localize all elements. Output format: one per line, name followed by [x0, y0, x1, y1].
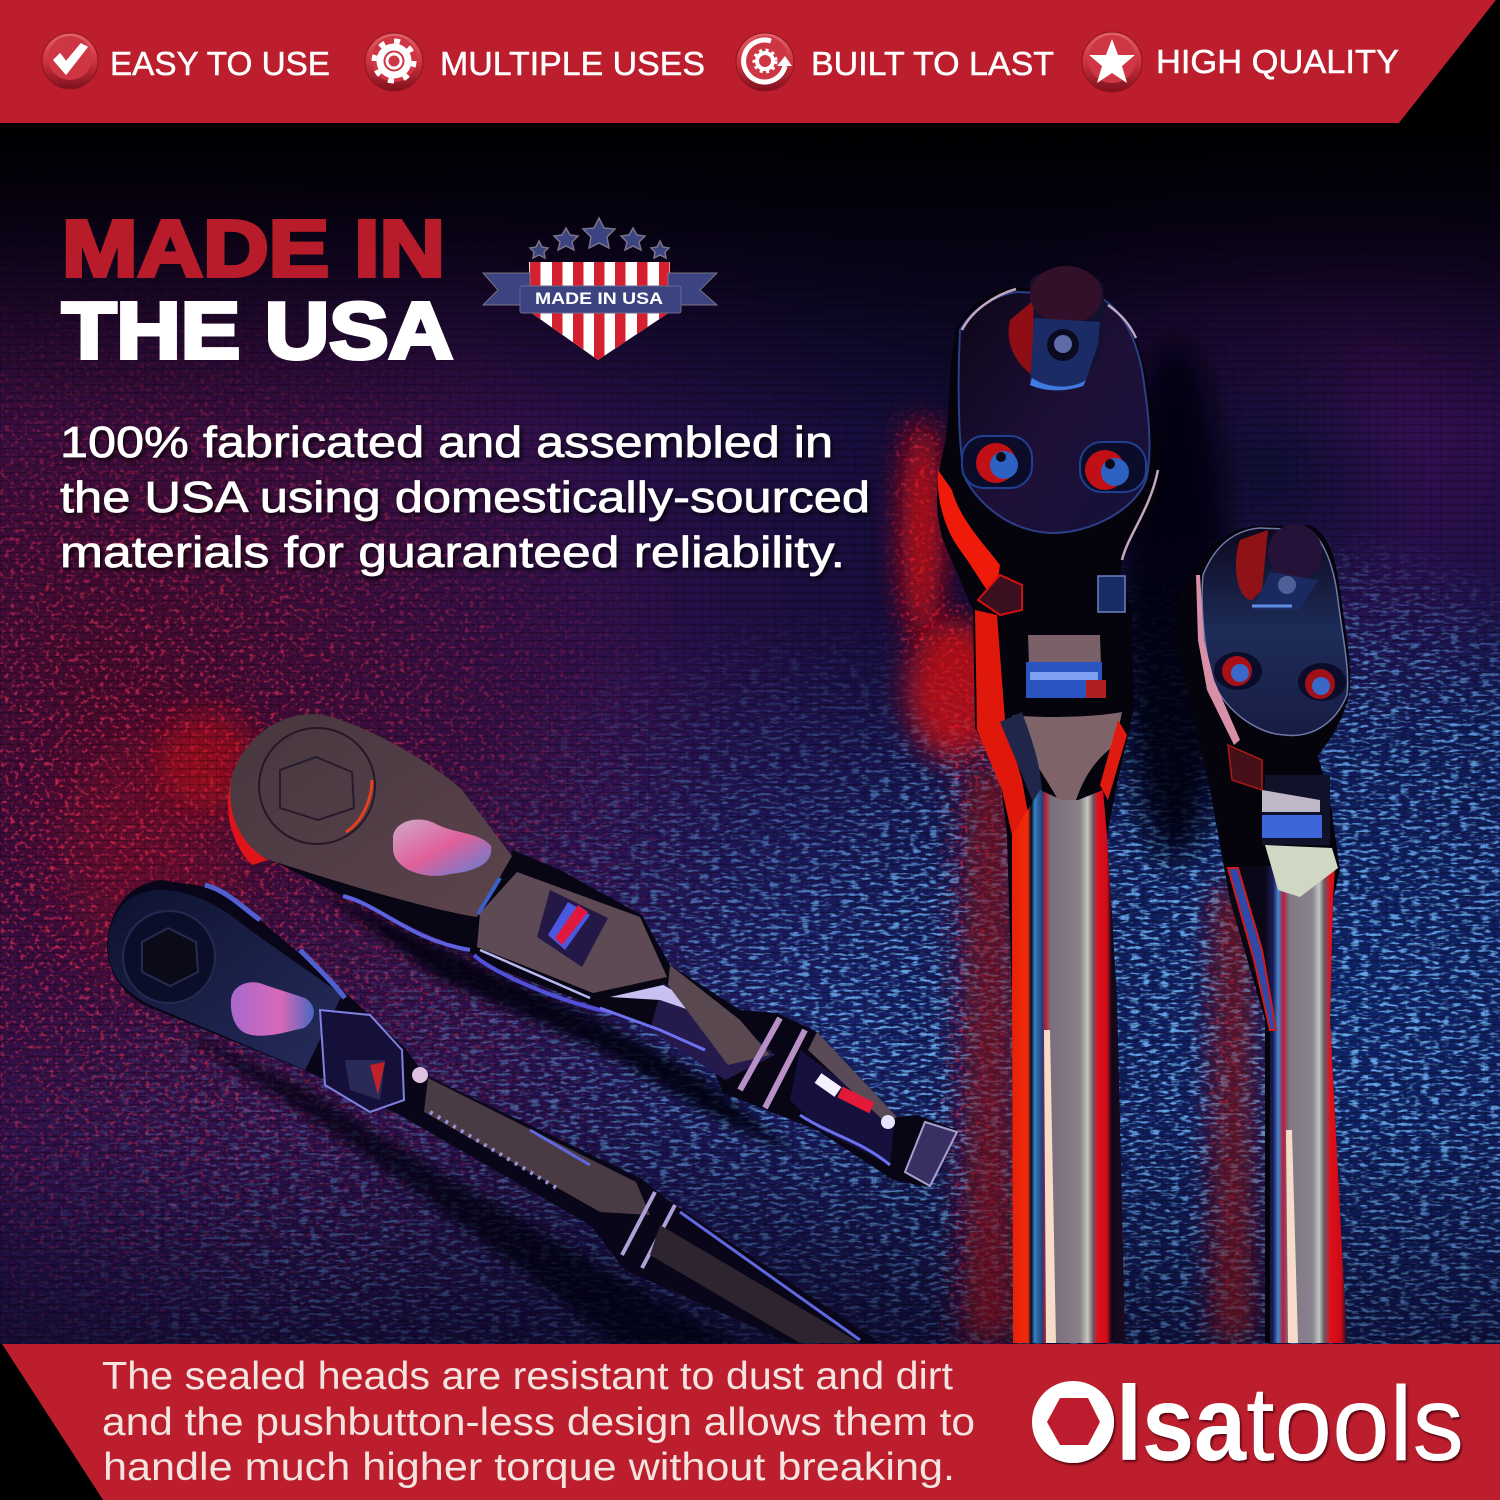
handle yoke V [1013, 712, 1122, 800]
right pivot hole [1080, 442, 1146, 492]
small left rim reflections [1196, 575, 1240, 745]
heading: made in the usa [62, 204, 453, 375]
wrench body silhouette [937, 288, 1158, 1343]
small head face [1202, 528, 1348, 735]
right black corner [1399, 0, 1500, 123]
square drive [1009, 266, 1105, 390]
handle B bright stripe [530, 1130, 860, 1340]
highlight on head rim [962, 289, 1158, 560]
icon: check button [42, 33, 98, 89]
shadow under wrench A [320, 890, 880, 1190]
logo: Olsatools [1029, 1362, 1464, 1485]
heading line 2: THE USA [62, 286, 453, 375]
flex joint knuckle [1098, 576, 1125, 612]
bottom text line 2: and the pushbutton-less design allows them to [102, 1401, 975, 1444]
paragraph: fabrication claim [60, 418, 870, 577]
flex slot B [320, 1010, 428, 1112]
flex plate A [474, 872, 667, 1012]
handle B mauve shaft [650, 1225, 860, 1343]
bottom text block [102, 1355, 975, 1489]
small handle shaft [1230, 866, 1347, 1343]
handle white highlight [1044, 1030, 1056, 1343]
ring and hex socket A [259, 728, 375, 844]
flex joint slot [1026, 635, 1106, 698]
small yoke V [1265, 845, 1338, 897]
feature: multiple uses [365, 33, 705, 91]
small wrench silhouette [1178, 525, 1350, 1343]
label: multiple uses: MULTIPLE USES [440, 45, 705, 82]
icon: star button [1082, 32, 1142, 92]
label: easy to use: EASY TO USE [110, 45, 330, 82]
badge stars [530, 218, 669, 258]
wrench lying diagonal, lower [107, 880, 880, 1345]
banner shape [0, 0, 1496, 123]
small handle highlight [1286, 1130, 1298, 1343]
bottom banner [0, 1344, 1500, 1500]
left pivot hole [962, 436, 1032, 488]
release paddle B [231, 982, 314, 1036]
badge: made in usa shield [483, 218, 717, 362]
small pivot holes [1214, 652, 1346, 701]
bottom text line 3: handle much higher torque without breaking. [103, 1446, 955, 1489]
wrench B head [108, 890, 342, 1070]
logo: Olsatools: tools [1246, 1365, 1464, 1483]
bottom banner shape [2, 1344, 1500, 1500]
grip rings B [622, 1192, 675, 1268]
shadow under wrench B [180, 1030, 740, 1345]
top feature banner [0, 0, 1500, 123]
feature: easy to use [42, 33, 330, 89]
handle B engraved logo dots [430, 1112, 560, 1190]
logo: Olsatools: lsa [1116, 1365, 1247, 1483]
wrench B outer silhouette [107, 880, 880, 1343]
release paddle A [393, 820, 491, 876]
left red reflection [938, 470, 1000, 600]
chrome rim B [205, 885, 345, 998]
small square drive [1236, 524, 1322, 610]
badge ribbon tails [483, 273, 717, 305]
badge ribbon band [520, 286, 681, 313]
red edge A [228, 780, 268, 865]
label: built to last: BUILT TO LAST [811, 45, 1054, 82]
wrench glow: red light on fabric [902, 340, 1251, 1340]
icon: cycle gear button [736, 33, 794, 91]
badge label: MADE IN USA [535, 290, 663, 308]
icon: gear button [365, 33, 423, 91]
badge shield stripes [529, 262, 671, 362]
heading line 1: MADE IN [62, 204, 445, 293]
handle B plate with engraved logo [424, 1078, 650, 1215]
wrench lying diagonal, upper [228, 714, 957, 1190]
feature: built to last [736, 33, 1054, 91]
feature: high quality [1082, 32, 1399, 92]
head face plate [959, 292, 1149, 533]
paragraph line 1: 100% fabricated and assembled in [60, 418, 833, 467]
wrench A head [228, 714, 512, 917]
handle A chrome [600, 965, 957, 1186]
small flex slot [1262, 775, 1330, 845]
left black corner [0, 1344, 103, 1500]
large upright ratchet wrench [937, 266, 1158, 1343]
wrench A silhouette [253, 850, 957, 1187]
neck chrome A [343, 896, 470, 950]
small upright ratchet wrench [1178, 524, 1350, 1343]
ring and hex socket B [123, 911, 215, 1003]
paragraph line 2: the USA using domestically-sourced [60, 473, 870, 522]
paragraph line 3: materials for guaranteed reliability. [60, 528, 845, 577]
small handle left rim [1228, 868, 1276, 1030]
logo: Olsatools: O [1029, 1362, 1117, 1485]
label: high quality: HIGH QUALITY [1156, 43, 1399, 80]
handle shaft [1012, 790, 1125, 1343]
bottom text line 1: The sealed heads are resistant to dust and dirt [102, 1355, 953, 1398]
